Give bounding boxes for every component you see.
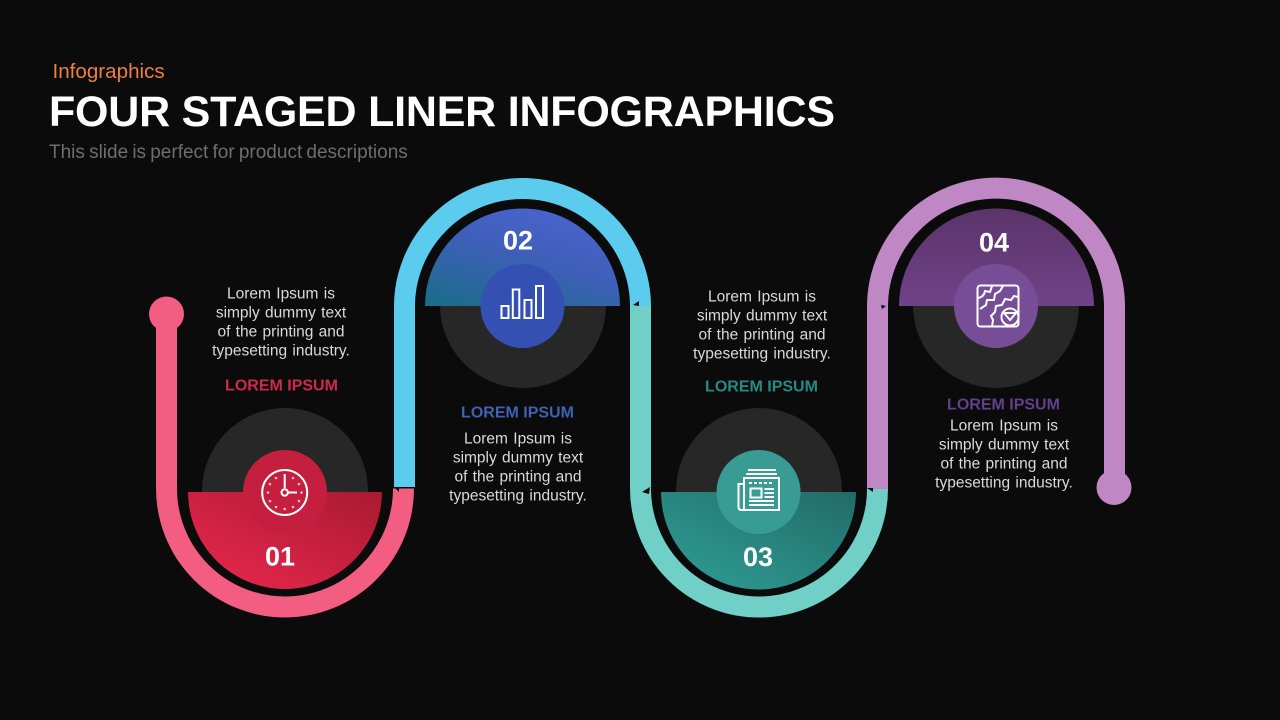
stage 4 dark disc: [913, 222, 1079, 388]
track: stage 3 teal: [640, 306, 878, 607]
stage 3 half disc: [661, 492, 856, 590]
stage 2 dark disc: [440, 222, 606, 388]
stage 4 text: Lorem Ipsum is: [950, 418, 1058, 434]
stage 2 icon disc: [480, 264, 564, 348]
track: stage 2 blue: [404, 188, 640, 487]
stage 3 text: simply dummy text: [697, 308, 828, 324]
track: stage 4 purple: [878, 188, 1132, 505]
stage 2 text: of the printing and: [454, 468, 582, 486]
stage 1 text: simply dummy text: [216, 304, 347, 322]
icon: clock: [262, 470, 307, 515]
icon: gears map: [978, 286, 1018, 327]
stage 3 dark disc: [676, 408, 842, 574]
stage 3 text: of the printing and: [698, 326, 826, 344]
stage 3 text: [693, 288, 831, 362]
stage 2: [425, 208, 620, 388]
subtitle: This slide is perfect for product descriptions: [49, 142, 408, 163]
stage 1 icon disc: [243, 450, 327, 534]
icon: bar chart: [502, 286, 543, 318]
stage 1 text: [212, 286, 350, 360]
stage 2 text: simply dummy text: [453, 450, 584, 466]
stage 2 number: 02: [503, 226, 533, 256]
stage 4 text: [935, 418, 1073, 492]
eyebrow: Infographics: Infographics: [52, 60, 165, 83]
stage 4 number: 04: [979, 228, 1009, 258]
stage 4: [899, 208, 1094, 388]
stage 1 text: typesetting industry.: [212, 342, 350, 360]
stage 1 label: LOREM IPSUM: [225, 378, 338, 394]
stage 1 half disc: [188, 492, 382, 589]
title: FOUR STAGED LINER INFOGRAPHICS: [49, 88, 835, 136]
stage 1 text: Lorem Ipsum is: [227, 286, 335, 302]
stage 2 half disc: [425, 208, 620, 306]
stage 1 number: 01: [265, 542, 295, 572]
stage 4 half disc: [899, 208, 1094, 306]
track: stage 1 pink: [149, 296, 404, 607]
stage 3 text: typesetting industry.: [693, 346, 831, 362]
stage 2 text: typesetting industry.: [449, 488, 587, 504]
icon: newspaper: [738, 470, 779, 510]
stage 4 label: LOREM IPSUM: [947, 396, 1060, 414]
stage 4 text: of the printing and: [940, 456, 1068, 472]
stage 2 text: [449, 430, 587, 504]
stage 3 text: Lorem Ipsum is: [708, 288, 816, 306]
stage 4 icon disc: [954, 264, 1038, 348]
stage 3 label: LOREM IPSUM: [705, 378, 818, 396]
join notches: [394, 301, 886, 494]
stage 3: [661, 408, 856, 590]
stage 1: [188, 408, 382, 589]
stage 4 text: simply dummy text: [939, 436, 1070, 454]
stage 2 label: LOREM IPSUM: [461, 404, 574, 422]
stage 1 dark disc: [202, 408, 368, 574]
stage 3 icon disc: [716, 450, 800, 534]
stage 3 number: 03: [743, 542, 773, 572]
stage 1 text: of the printing and: [217, 324, 345, 340]
stage 4 text: typesetting industry.: [935, 474, 1073, 492]
stage 2 text: Lorem Ipsum is: [464, 430, 572, 448]
